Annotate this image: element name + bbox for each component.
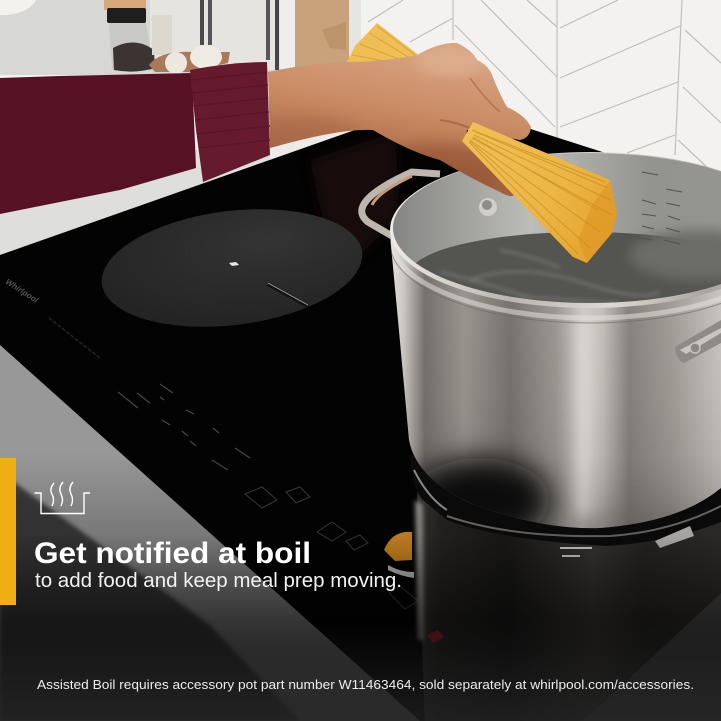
chevron tile wall xyxy=(368,0,721,170)
induction burner ring xyxy=(95,195,369,341)
pasta top of bundle xyxy=(347,23,420,70)
yellow accent bar xyxy=(0,458,16,605)
pot base ring xyxy=(410,455,721,556)
white counter strip behind cooktop xyxy=(0,150,440,270)
Whirlpool logo on glass: Whirlpool xyxy=(4,277,40,305)
dark counter recess xyxy=(0,472,300,721)
glass model line text xyxy=(49,318,100,358)
front counter edge xyxy=(0,345,430,721)
left reflected edge highlight xyxy=(415,500,424,640)
cooktop reflection of cabinets xyxy=(310,132,400,260)
red sweater sleeve xyxy=(0,73,196,214)
pot measuring marks xyxy=(640,172,682,244)
pepper grinder and bowl xyxy=(104,0,230,74)
pot reflection on glass xyxy=(416,460,721,721)
kitchen wall background xyxy=(0,0,721,260)
sweater cuff xyxy=(190,62,270,182)
bottom haze xyxy=(0,620,721,721)
reflected pasta on glass xyxy=(384,532,414,578)
forearm and hand xyxy=(268,42,531,196)
red power control xyxy=(427,630,444,643)
boiling water xyxy=(416,225,721,303)
countertop and back shelf props xyxy=(0,0,361,75)
title: Get notified at boil xyxy=(34,537,311,570)
subtitle: to add food and keep meal prep moving. xyxy=(35,569,402,592)
pasta lower bundle xyxy=(462,122,617,263)
right side counter xyxy=(573,593,721,721)
left pot handle xyxy=(362,172,440,236)
touch controls lower cluster xyxy=(245,487,418,609)
pot interior wall xyxy=(390,152,721,308)
lid knob rivet xyxy=(479,198,497,216)
stainless pot body xyxy=(390,238,721,528)
footnote: Assisted Boil requires accessory pot part number W11463464, sold separately at whirlpool.com/accessories. xyxy=(37,677,694,692)
burner indicator bar xyxy=(268,283,308,306)
touch controls upper cluster xyxy=(118,384,250,470)
icon: boiling pot with steam xyxy=(34,482,90,514)
bottom dark gradient overlay xyxy=(0,455,721,721)
burner centre marker xyxy=(229,262,239,266)
right pot handle xyxy=(675,320,721,363)
